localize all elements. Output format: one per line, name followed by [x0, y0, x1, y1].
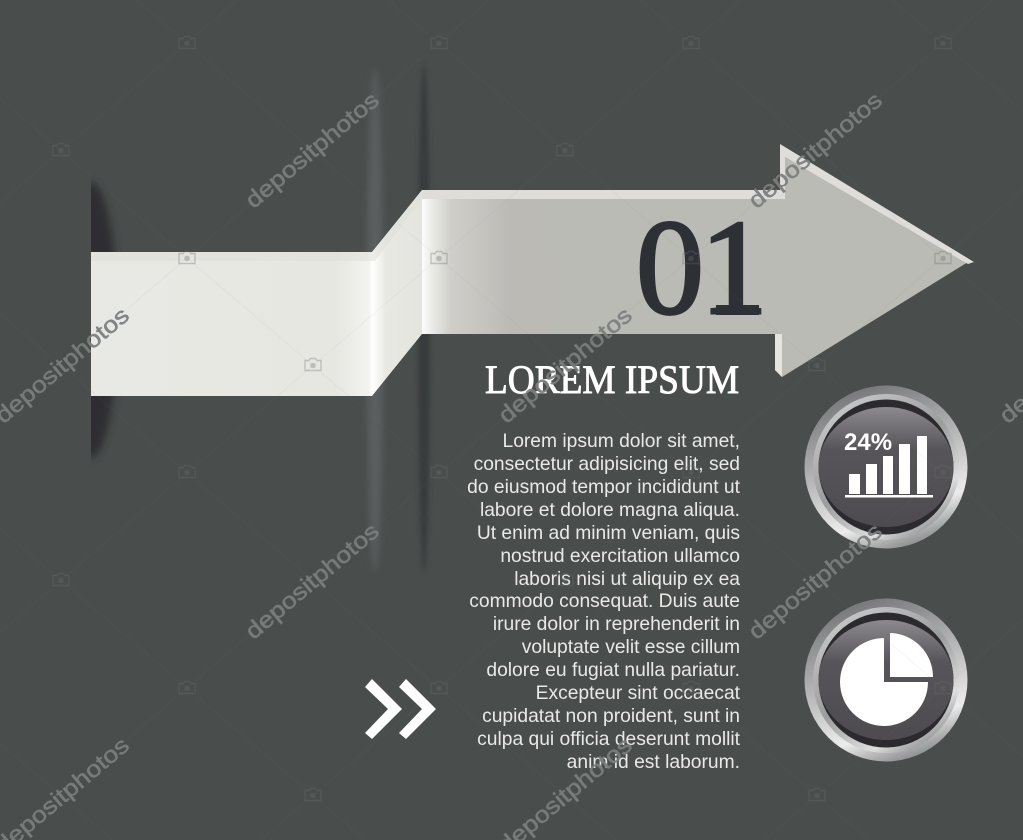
watermark: depositphotos: [743, 518, 887, 644]
watermark: depositphotos: [493, 302, 637, 428]
body text: consectetur adipisicing elit, sed: [474, 454, 740, 475]
watermark: depositphotos: [240, 87, 384, 213]
shadow: left slit: [91, 181, 117, 459]
number 01: 01: [636, 193, 768, 343]
arrow ribbon: [91, 144, 974, 396]
body text: culpa qui officia deserunt mollit: [477, 729, 741, 750]
icon: double chevron arrow: [365, 679, 436, 739]
body text: cupidatat non proident, sunt in: [482, 706, 740, 727]
body text: commodo consequat. Duis aute: [469, 591, 740, 612]
arrow lower bevel: [775, 334, 782, 377]
body text: Ut enim ad minim veniam, quis: [477, 523, 740, 544]
body text: do eiusmod tempor incididunt ut: [467, 477, 741, 498]
body text: laboris nisi ut aliquip ex ea: [514, 569, 740, 590]
body text: Lorem ipsum dolor sit amet,: [502, 431, 740, 452]
body text: irure dolor in reprehenderit in: [493, 614, 740, 635]
body text: nostrud exercitation ullamco: [500, 546, 740, 567]
ribbon left strip: [91, 190, 422, 396]
icon: bar chart badge: [804, 386, 968, 548]
arrow top bevel: [422, 144, 974, 264]
arrow body: [422, 157, 968, 377]
body text: dolore eu fugiat nulla pariatur.: [486, 660, 740, 681]
bar chart label: 24%: [844, 429, 892, 456]
shadow: middle light slit: [367, 68, 383, 572]
pie quarter slice: [890, 633, 933, 677]
body text: anim id est laborum.: [567, 752, 740, 773]
watermark: depositphotos: [240, 518, 384, 644]
body text: labore et dolore magna aliqua.: [480, 500, 740, 521]
body text: voluptate velit esse cillum: [522, 637, 740, 658]
ribbon top bevel: [91, 190, 422, 261]
shadow: right dark slit: [418, 64, 430, 572]
bars: [845, 436, 933, 498]
watermark: depositphotos: [743, 87, 887, 213]
heading: LOREM IPSUM: [485, 357, 739, 402]
pie main slice: [840, 638, 928, 726]
icon: pie chart badge: [804, 598, 968, 762]
body text: Excepteur sint occaecat: [536, 683, 741, 704]
